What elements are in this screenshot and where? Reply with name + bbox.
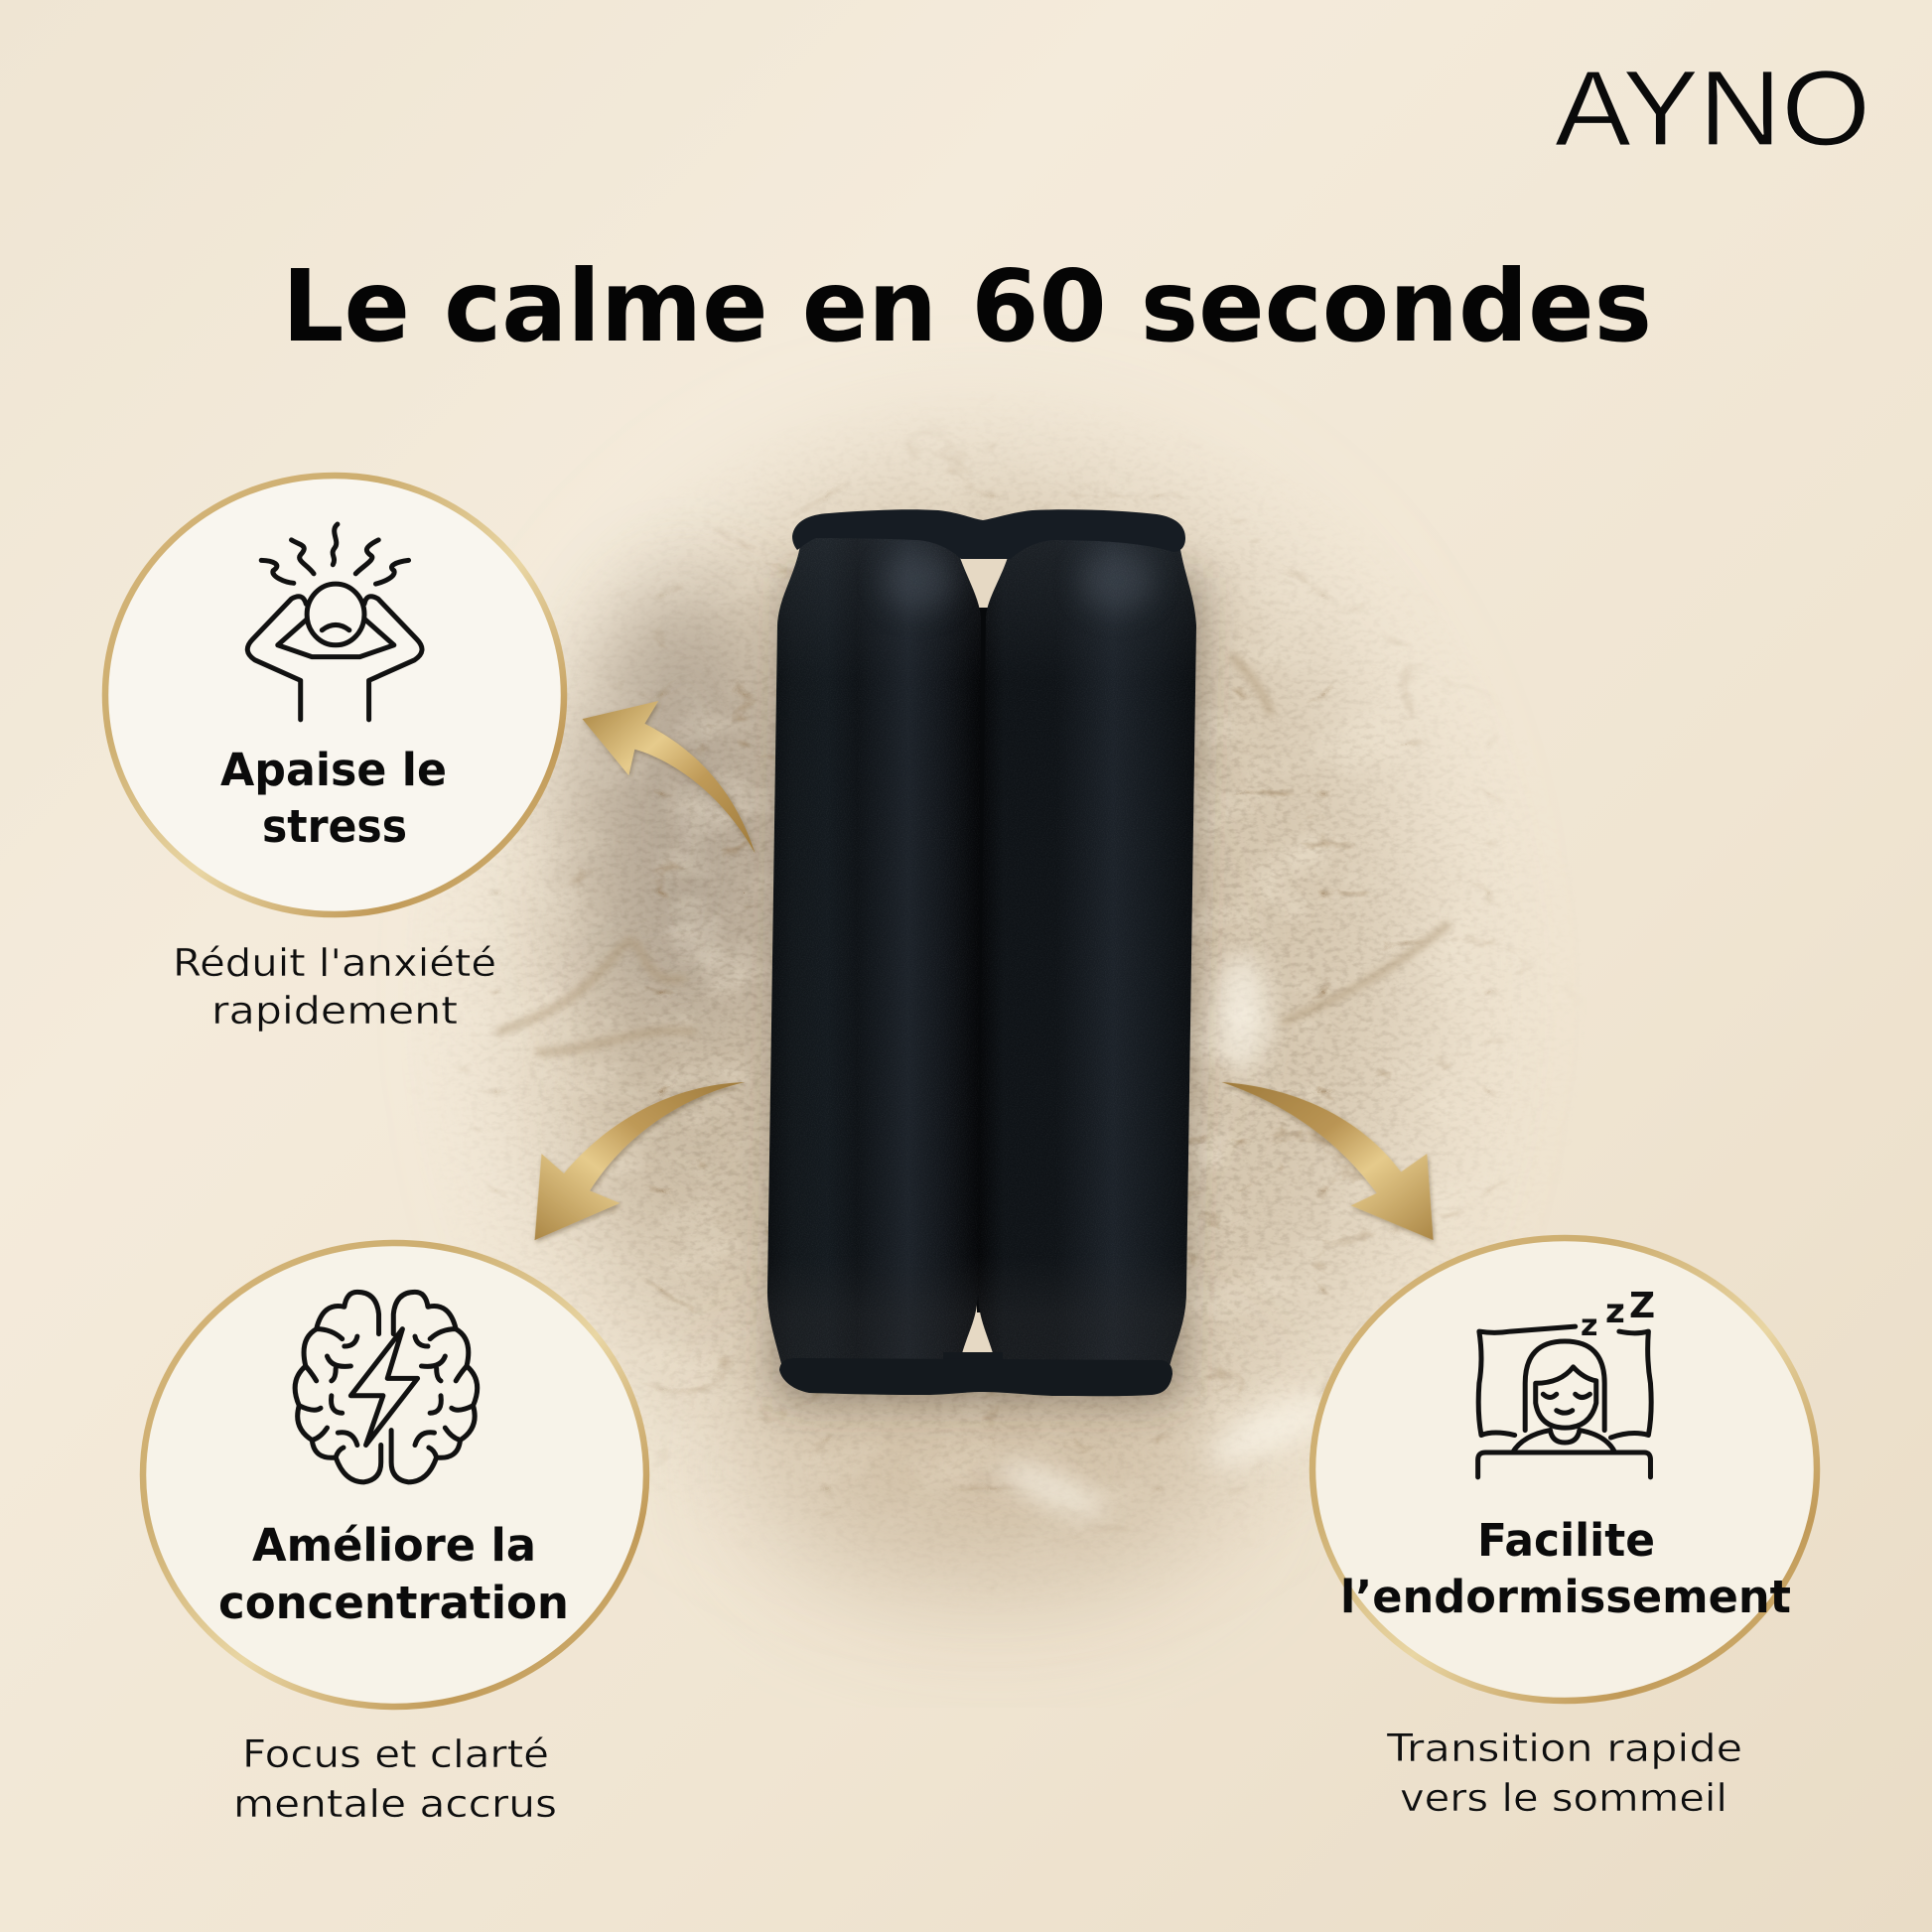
circle badge: [105, 476, 564, 914]
text: Transition rapide vers le sommeil: [1386, 1726, 1742, 1820]
text: Transition rapide vers le sommeil: Transition rapide: [1386, 1726, 1742, 1770]
background: marble surface: [102, 419, 1932, 1932]
product: twin black rollers: [764, 509, 1201, 1397]
text: Réduit l'anxiété rapidement: [173, 941, 496, 1033]
circle badge: [143, 1243, 646, 1707]
text: Réduit l'anxiété rapidement: rapidement: [211, 989, 458, 1033]
text: Transition rapide vers le sommeil: vers le sommeil: [1400, 1776, 1727, 1820]
arrow: to stress panel: [582, 701, 756, 853]
icon: brain with lightning: [295, 1292, 478, 1482]
heading: Facilite l'endormissement: Facilite: [1477, 1514, 1655, 1567]
icon letters: zzz: z: [1605, 1292, 1625, 1331]
panel: stress: [105, 476, 564, 1033]
icon: stressed person: [247, 524, 422, 720]
heading: Améliore la concentration: Améliore la: [252, 1519, 536, 1572]
icon lines: pillow, face and bed: [1478, 1326, 1651, 1477]
heading: Améliore la concentration: concentration: [218, 1577, 569, 1629]
heading: Facilite l'endormissement: [1340, 1514, 1791, 1623]
text: Réduit l'anxiété rapidement: Réduit l'anxiété: [173, 941, 496, 985]
heading: Apaise le stress: Apaise le: [220, 744, 447, 796]
title: Le calme en 60 secondes: [282, 248, 1652, 364]
icon letters: zzz: Z: [1629, 1286, 1655, 1326]
text: Focus et clarté mentale accrus: mentale accrus: [233, 1782, 557, 1826]
icon letters: zzz: z: [1581, 1309, 1597, 1343]
heading: Améliore la concentration: [218, 1519, 569, 1629]
arrow: to sleep panel: [1221, 1082, 1434, 1240]
circle badge: [1312, 1238, 1817, 1701]
logo: AYNO: AYNO: [1555, 48, 1870, 168]
heading: Facilite l'endormissement: l’endormissement: [1340, 1571, 1791, 1623]
heading: Apaise le stress: [220, 744, 447, 853]
text: Focus et clarté mentale accrus: Focus et clarté: [242, 1732, 549, 1776]
text: Focus et clarté mentale accrus: [233, 1732, 557, 1826]
panel: sleep: [1312, 1238, 1817, 1820]
arrow: to concentration panel: [535, 1082, 745, 1240]
icon: sleeping woman: [1478, 1286, 1655, 1477]
icon letters: zzz: [1581, 1286, 1655, 1343]
panel: concentration: [143, 1243, 646, 1826]
heading: Apaise le stress: stress: [262, 800, 407, 853]
